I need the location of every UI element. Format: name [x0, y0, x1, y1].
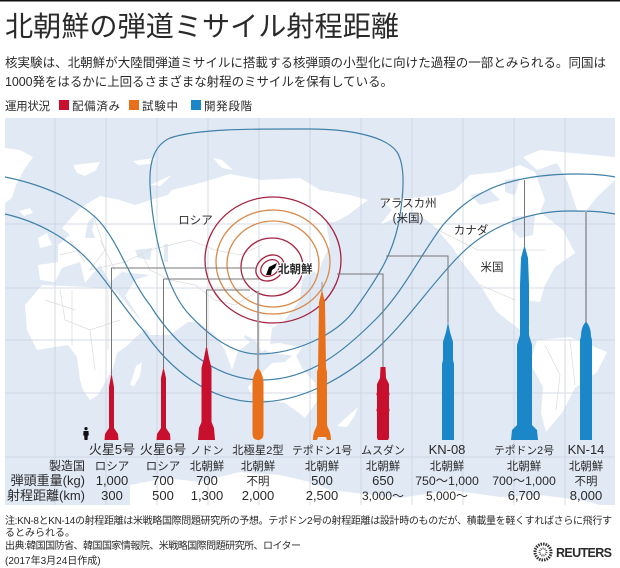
table column: Musudan — [361, 443, 405, 503]
table column: Taepodong-1: テポドン1号 — [292, 444, 352, 457]
map labels: カナダ — [454, 223, 489, 237]
intro text — [5, 55, 606, 89]
table column: Taepodong-2: 北朝鮮 — [507, 459, 542, 473]
intro text: 核実験は、北朝鮮が大陸間弾道ミサイルに搭載する核弾頭の小型化に向けた過程の一部とみられる。同国は — [5, 55, 606, 70]
table column: KN-14: 8,000 — [570, 488, 602, 503]
table column: KN-08: KN-08 — [429, 442, 465, 457]
table column: KN-14: 不明 — [574, 475, 598, 488]
footnotes: 注:KN-8とKN-14の射程距離は米戦略国際問題研究所の予想。テポドン2号の射程距離は設計時のものだが、積載量を軽くすればさらに飛行す — [5, 514, 612, 527]
table column: Hwasong-6: 500 — [152, 488, 174, 503]
table row labels: 射程距離(km) — [7, 488, 85, 503]
table column: Pukguksong-2 — [232, 443, 284, 503]
table column: KN-08: 北朝鮮 — [430, 459, 465, 473]
table column: KN-08: 5,000〜 — [426, 489, 468, 503]
table column: Nodong: ノドン — [190, 445, 224, 457]
table column: Hwasong-5: 火星5号 — [89, 442, 135, 457]
legend: 運用状況 — [5, 99, 50, 113]
table column: KN-14 — [568, 442, 604, 503]
missile: Nodong — [198, 345, 215, 440]
table row labels — [7, 459, 85, 503]
footnotes: (2017年3月24日作成) — [5, 554, 101, 567]
table column: KN-08: 750〜1,000 — [415, 474, 479, 488]
table column: KN-14: KN-14 — [568, 442, 604, 457]
table column: Pukguksong-2: 北朝鮮 — [241, 459, 276, 473]
table column: Hwasong-5: ロシア — [95, 461, 129, 473]
table column: KN-08 — [415, 442, 479, 503]
table column: Nodong: 北朝鮮 — [190, 459, 225, 473]
connector lines — [112, 180, 586, 374]
footnotes — [5, 514, 612, 567]
legend — [5, 99, 252, 113]
table column: Nodong: 1,300 — [191, 488, 223, 503]
table column: Taepodong-1 — [292, 444, 352, 503]
map labels — [178, 197, 504, 274]
table column: Taepodong-1: 2,500 — [306, 488, 338, 503]
missile: KN-08 — [442, 322, 454, 440]
table column: Musudan: 3,000〜 — [362, 489, 404, 503]
map labels: アラスカ州 — [379, 197, 437, 210]
table column: Musudan: 北朝鮮 — [366, 459, 401, 473]
panel: world map — [5, 118, 615, 505]
table column: Pukguksong-2: 北極星2型 — [232, 443, 284, 457]
table row labels: 製造国 — [49, 459, 85, 473]
intro text: 1000発をはるかに上回るさまざまな射程のミサイルを保有している。 — [5, 74, 393, 89]
table column: Taepodong-1: 北朝鮮 — [305, 459, 340, 473]
table column: Hwasong-6 — [140, 442, 186, 503]
table column: Hwasong-6: ロシア — [146, 461, 180, 473]
missile: Taepodong-2 — [511, 245, 538, 440]
table column: KN-14: 北朝鮮 — [569, 459, 604, 473]
table column: Hwasong-6: 700 — [152, 473, 174, 488]
table column: Nodong: 700 — [196, 473, 218, 488]
missile: Taepodong-1 — [313, 290, 331, 440]
graticule — [5, 118, 615, 505]
map labels: (米国) — [393, 212, 423, 225]
table column: Hwasong-5: 1,000 — [96, 473, 128, 488]
table column: Pukguksong-2: 不明 — [246, 475, 270, 488]
inland seas — [85, 178, 535, 262]
Reuters logo: REUTERS — [556, 546, 612, 560]
table column: Taepodong-2: 700〜1,000 — [492, 474, 556, 488]
table column: Pukguksong-2: 2,000 — [242, 488, 274, 503]
missile: Musudan — [376, 367, 390, 440]
table column: Hwasong-6: 火星6号 — [140, 442, 186, 457]
North Korea marker and label: 北朝鮮 — [278, 262, 313, 276]
range contours around North Korea — [205, 197, 341, 323]
land masses — [5, 148, 615, 505]
map labels: 米国 — [480, 261, 504, 274]
missile: Hwasong-6 — [156, 367, 170, 440]
missile: KN-14 — [580, 322, 592, 440]
missile: Hwasong-5 — [104, 373, 118, 440]
icon: person scale — [83, 427, 89, 440]
North Korea marker and label — [266, 262, 313, 276]
table column: Taepodong-2: テポドン2号 — [494, 444, 554, 457]
Reuters logo — [535, 544, 612, 560]
table column: Hwasong-5 — [89, 442, 135, 503]
table column: Taepodong-2 — [492, 444, 556, 503]
missile: Pukguksong-2 — [252, 368, 264, 440]
legend: 配備済み — [72, 100, 120, 113]
range curve: 6,700 km — [5, 174, 615, 380]
table column: Hwasong-5: 300 — [101, 488, 123, 503]
title: 北朝鮮の弾道ミサイル射程距離 — [5, 11, 399, 42]
table column: Musudan: 650 — [372, 473, 394, 488]
legend: 試験中 — [142, 99, 178, 113]
table column: Taepodong-2: 6,700 — [508, 488, 540, 503]
table column: Musudan: ムスダン — [361, 443, 405, 457]
borders — [45, 220, 575, 410]
range curve: 5,000 km — [150, 129, 403, 354]
map labels: ロシア — [178, 215, 213, 227]
range curve: 8,000 km — [5, 211, 615, 402]
footnotes: るとみられる。 — [5, 527, 75, 539]
legend: 開発段階 — [204, 99, 252, 113]
footnotes: 出典:韓国国防省、韓国国家情報院、米戦略国際問題研究所、ロイター — [5, 539, 301, 552]
table column: Taepodong-1: 500 — [311, 473, 333, 488]
table row labels: 弾頭重量(kg) — [11, 473, 85, 488]
table column: Nodong — [190, 445, 225, 503]
